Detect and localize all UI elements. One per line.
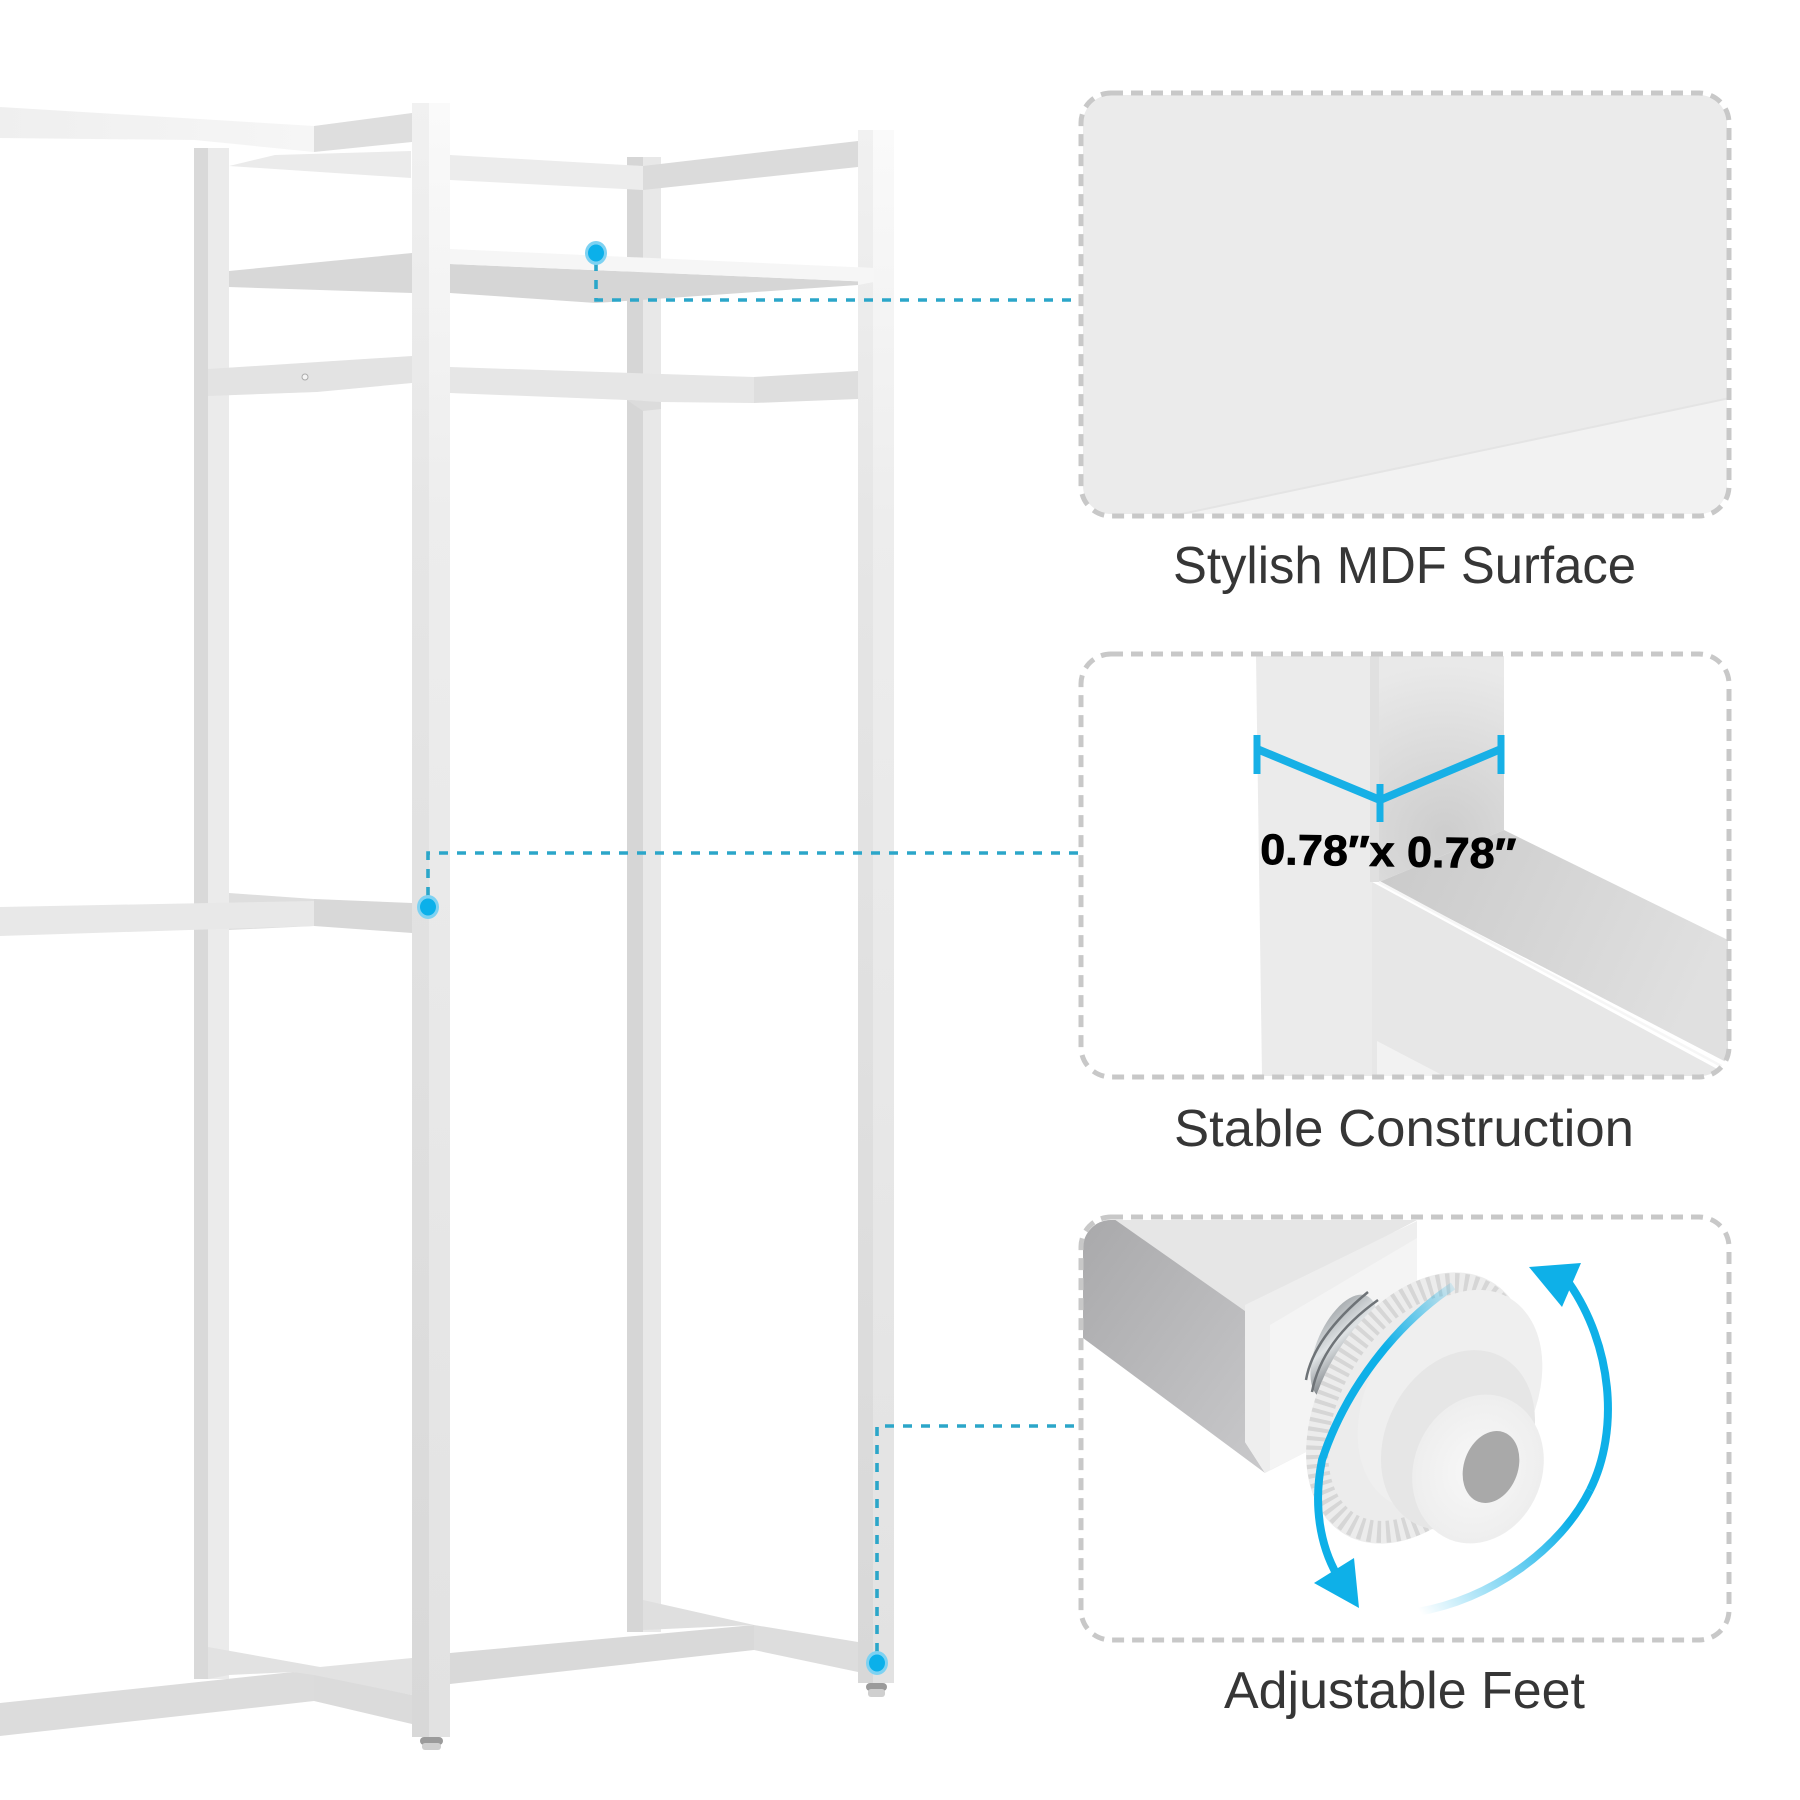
rubber foot bbox=[1351, 1324, 1566, 1563]
surface texture bbox=[1083, 95, 1730, 516]
rotation arrow: left bbox=[1314, 1286, 1453, 1608]
callout line: surface bbox=[585, 241, 1080, 300]
shelf end overlapping right post bbox=[858, 267, 874, 285]
front right post bbox=[858, 130, 894, 1683]
rotation arrow: right bbox=[1417, 1263, 1608, 1612]
front left foot bbox=[420, 1737, 443, 1750]
leg tube bbox=[1083, 1219, 1417, 1473]
bolt bbox=[302, 374, 308, 380]
callout line: feet bbox=[866, 1426, 1080, 1675]
front right foot bbox=[866, 1683, 887, 1697]
dashed frame bbox=[1081, 1217, 1729, 1640]
top left long beam bbox=[0, 107, 314, 152]
threaded stud bbox=[1297, 1285, 1391, 1409]
caption: Stylish MDF Surface bbox=[1173, 537, 1636, 595]
caption: Adjustable Feet bbox=[1224, 1662, 1586, 1720]
panel: Stable Construction bbox=[1081, 654, 1730, 1158]
top left short beam bbox=[314, 113, 412, 152]
dashed frame bbox=[1081, 654, 1729, 1077]
caption: Stable Construction bbox=[1174, 1100, 1634, 1158]
clothes rack frame bbox=[0, 103, 894, 1750]
panel: Adjustable Feet bbox=[1081, 1217, 1729, 1720]
lower shelf rail bbox=[208, 356, 858, 411]
dimension marker bbox=[1257, 735, 1501, 822]
rear right post bbox=[627, 157, 661, 1632]
callout line: construction bbox=[417, 853, 1080, 919]
top rear beam bbox=[229, 151, 643, 190]
upper shelf bbox=[229, 249, 874, 303]
dashed frame bbox=[1081, 93, 1729, 516]
top right beam bbox=[643, 141, 858, 190]
bottom beams bbox=[0, 1600, 858, 1736]
panel: Stylish MDF Surface bbox=[1081, 93, 1730, 595]
post and beam joint bbox=[1256, 656, 1730, 1076]
knurled wheel bbox=[1260, 1233, 1580, 1583]
dimension label: 0.78″x 0.78″ bbox=[1260, 826, 1517, 878]
front left post bbox=[412, 103, 450, 1737]
middle left beams bbox=[0, 893, 412, 936]
rear left post bbox=[194, 148, 229, 1679]
